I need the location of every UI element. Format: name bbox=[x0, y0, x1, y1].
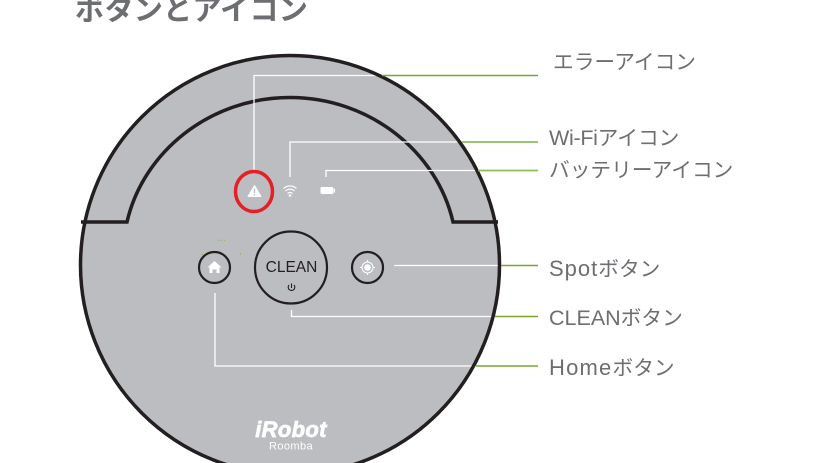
leader: clean button bbox=[292, 310, 495, 316]
bumper arc bbox=[81, 98, 498, 222]
leader: wifi icon green part bbox=[462, 141, 538, 143]
logo: iRobot Roomba: iRobot bbox=[255, 417, 328, 442]
leader: error icon green part bbox=[382, 74, 538, 76]
leader: clean button green part bbox=[495, 316, 538, 318]
icon: battery bbox=[320, 187, 335, 194]
label: error icon: エラーアイコン bbox=[553, 51, 696, 74]
label: wifi icon: Wi-Fiアイコン bbox=[549, 126, 679, 150]
logo: iRobot Roomba: Roomba bbox=[269, 440, 313, 452]
leader: wifi icon bbox=[290, 142, 462, 177]
leader: home button green part bbox=[476, 365, 538, 367]
clean button bbox=[255, 232, 327, 304]
leader: spot button bbox=[394, 264, 501, 266]
clean button: CLEAN bbox=[266, 259, 317, 276]
label: battery icon: バッテリーアイコン bbox=[549, 159, 733, 182]
leader: spot button green part bbox=[501, 264, 538, 266]
leader: error icon bbox=[254, 76, 382, 171]
leader: battery icon green part bbox=[478, 170, 538, 172]
label: spot button: Spotボタン bbox=[549, 256, 660, 281]
robot body outline bbox=[80, 56, 500, 463]
robot body fill bbox=[80, 56, 500, 463]
logo: iRobot Roomba bbox=[255, 417, 328, 452]
label: home button: Homeボタン bbox=[549, 355, 675, 380]
icon: wifi bbox=[284, 186, 296, 196]
home button bbox=[199, 252, 230, 283]
spot button bbox=[352, 252, 383, 283]
icon: error warning with red ring bbox=[236, 172, 272, 212]
leader: home button bbox=[215, 293, 476, 366]
status specks bbox=[202, 240, 241, 255]
label: clean button: CLEANボタン bbox=[549, 306, 683, 330]
leader: battery icon bbox=[326, 170, 478, 177]
